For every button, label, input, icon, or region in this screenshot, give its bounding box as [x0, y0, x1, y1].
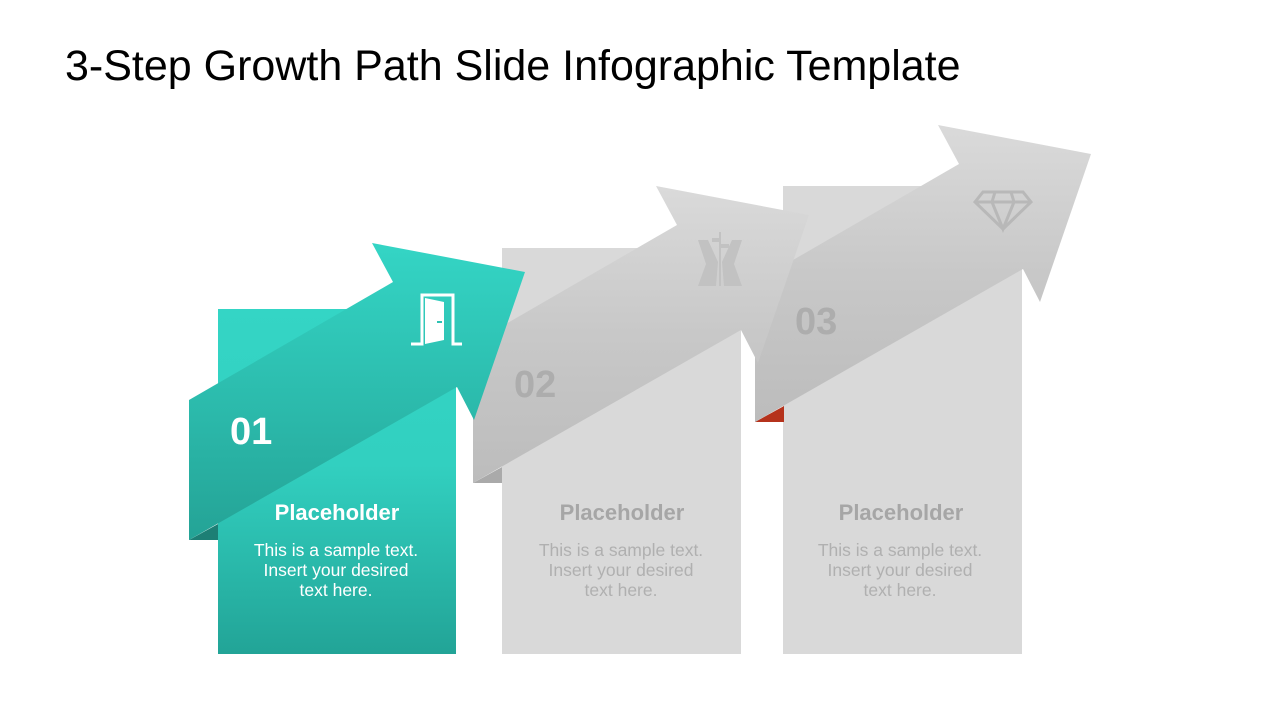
- number 03: 03: [795, 301, 837, 343]
- number 01: 01: [230, 411, 272, 453]
- text 1: This is a sample text.: [254, 540, 418, 560]
- icon: diamond: [975, 192, 1031, 229]
- icon: door: [411, 295, 462, 344]
- heading 3: Placeholder: [839, 500, 964, 525]
- icon: road: [698, 232, 742, 286]
- heading 2: Placeholder: [560, 500, 685, 525]
- text 2: Insert your desired: [549, 560, 693, 580]
- panel 1: [218, 309, 456, 654]
- text 1: Insert your desired: [264, 560, 408, 580]
- text 2: text here.: [585, 580, 657, 600]
- heading 1: Placeholder: [275, 500, 400, 525]
- text 3: Insert your desired: [828, 560, 972, 580]
- title: 3-Step Growth Path Slide Infographic Template: [65, 42, 961, 90]
- text 1: text here.: [300, 580, 372, 600]
- arrow 2: [473, 186, 809, 483]
- arrow 3: [755, 125, 1091, 422]
- panel 3: [783, 186, 1022, 654]
- text 3: text here.: [864, 580, 936, 600]
- arrow 1: [189, 243, 525, 540]
- text 3: This is a sample text.: [818, 540, 982, 560]
- number 02: 02: [514, 364, 556, 406]
- text 2: This is a sample text.: [539, 540, 703, 560]
- panel 2: [502, 248, 741, 654]
